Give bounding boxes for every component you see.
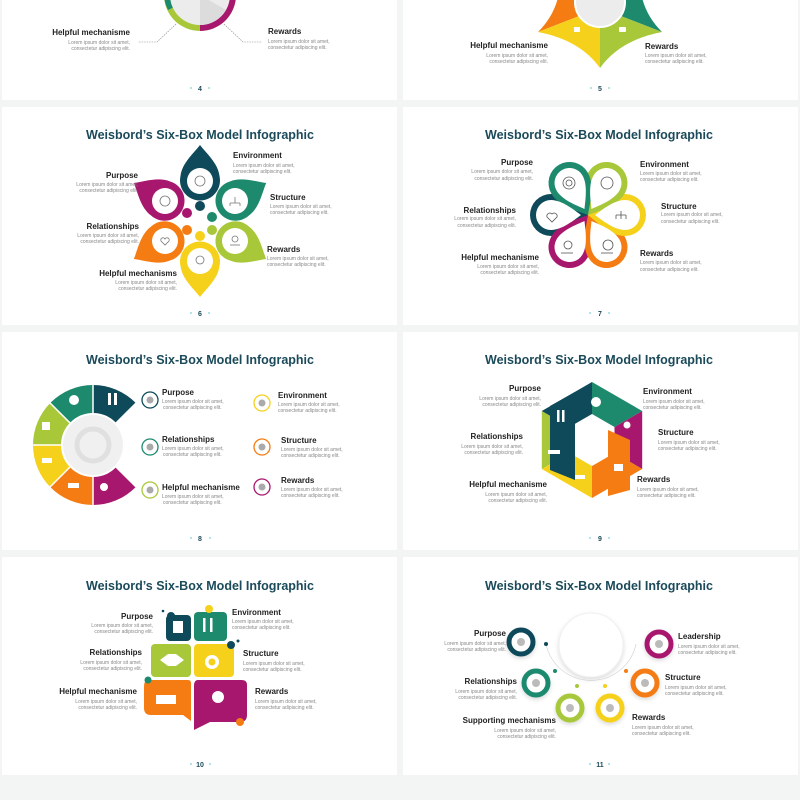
- slide 8: consectetur adipiscing elit.: [163, 452, 222, 458]
- slide 7: Structure: [661, 202, 697, 211]
- title: Weisbord’s Six-Box Model Infographic: [86, 353, 314, 367]
- slide 9: consectetur adipiscing elit.: [658, 446, 717, 452]
- label: helpful mechanisme: Helpful mechanisme: [470, 41, 549, 50]
- slide 9: Rewards: [637, 475, 671, 484]
- slide 10: Helpful mechanisme: [59, 687, 138, 696]
- page number 4: 4: [198, 86, 202, 93]
- slide 10: Lorem ipsum dolor sit amet,: [243, 661, 305, 667]
- title: Weisbord’s Six-Box Model Infographic: [485, 353, 713, 367]
- labels slide 8: Purpose: [162, 388, 195, 397]
- page number 9: 9: [598, 536, 602, 543]
- slide 10: Structure: [243, 649, 279, 658]
- slide 8: Helpful mechanisme: [162, 483, 240, 492]
- label: helpful mechanisme: consectetur adipiscing elit.: [489, 59, 548, 65]
- page number 5: 5: [598, 86, 602, 93]
- slide 6: consectetur adipiscing elit.: [80, 239, 139, 245]
- slide 6: consectetur adipiscing elit.: [267, 262, 326, 268]
- slide 10: consectetur adipiscing elit.: [243, 667, 302, 673]
- slide 11: consectetur adipiscing elit.: [678, 650, 737, 656]
- page number 11: [589, 762, 610, 769]
- slide 9: Relationships: [471, 432, 524, 441]
- title: Weisbord’s Six-Box Model Infographic: [86, 128, 314, 142]
- labels slide 6: Lorem ipsum dolor sit amet,: [233, 163, 295, 169]
- page number 8: [190, 536, 211, 543]
- slide 6: consectetur adipiscing elit.: [270, 210, 329, 216]
- item rings: [509, 630, 671, 720]
- labels slide 11: Lorem ipsum dolor sit amet,: [444, 641, 506, 647]
- slide 7: Lorem ipsum dolor sit amet,: [640, 171, 702, 177]
- slide 10: Lorem ipsum dolor sit amet,: [80, 660, 142, 666]
- slide 7: consectetur adipiscing elit.: [640, 177, 699, 183]
- slide 9: Lorem ipsum dolor sit amet,: [461, 444, 523, 450]
- slide 6: Lorem ipsum dolor sit amet,: [267, 256, 329, 262]
- page number 11: 11: [596, 762, 604, 769]
- slide 7: consectetur adipiscing elit.: [480, 270, 539, 276]
- page number 6: 6: [198, 311, 202, 318]
- slide 11: Lorem ipsum dolor sit amet,: [455, 689, 517, 695]
- slide 7: Helpful mechanisme: [461, 253, 540, 262]
- slide 7: Lorem ipsum dolor sit amet,: [661, 212, 723, 218]
- slide 8: consectetur adipiscing elit.: [281, 493, 340, 499]
- label: helpful mechanisme: Lorem ipsum dolor sit amet,: [68, 40, 130, 46]
- slide 6: Lorem ipsum dolor sit amet,: [77, 233, 139, 239]
- slide 11: consectetur adipiscing elit.: [665, 691, 724, 697]
- slide 6: consectetur adipiscing elit.: [118, 286, 177, 292]
- labels slide 10: consectetur adipiscing elit.: [94, 629, 153, 635]
- title: Weisbord’s Six-Box Model Infographic: [86, 579, 314, 593]
- label: helpful mechanisme: [470, 41, 549, 65]
- pie chart: [164, 0, 236, 31]
- slide 11: [403, 557, 798, 775]
- slide 5 (partial): [403, 0, 798, 100]
- slide 7: consectetur adipiscing elit.: [457, 223, 516, 229]
- page number 8: 8: [198, 536, 202, 543]
- slide 9: consectetur adipiscing elit.: [643, 405, 702, 411]
- labels slide 7: consectetur adipiscing elit.: [474, 176, 533, 182]
- label: rewards: consectetur adipiscing elit.: [645, 59, 704, 65]
- slide 10: Environment: [232, 608, 281, 617]
- label: rewards: [645, 42, 707, 65]
- slide 11: Supporting mechanisms: [463, 716, 557, 725]
- slide 10: Lorem ipsum dolor sit amet,: [232, 619, 294, 625]
- label: rewards: Lorem ipsum dolor sit amet,: [268, 39, 330, 45]
- slide 11: Leadership: [678, 632, 721, 641]
- slide 9: Environment: [643, 387, 692, 396]
- slide 6: Rewards: [267, 245, 301, 254]
- slide 6: Structure: [270, 193, 306, 202]
- arc with dots: [544, 642, 636, 688]
- slide 7: Rewards: [640, 249, 674, 258]
- center circle: [559, 613, 623, 677]
- page number 10: 10: [196, 762, 204, 769]
- page number 7: 7: [598, 311, 602, 318]
- slide 6: Purpose: [106, 171, 139, 180]
- slide 9: Lorem ipsum dolor sit amet,: [637, 487, 699, 493]
- slide 8: Rewards: [281, 476, 315, 485]
- slide 9: Lorem ipsum dolor sit amet,: [643, 399, 705, 405]
- page number 9: [589, 536, 610, 543]
- page number 10: [190, 762, 211, 769]
- slide 6: consectetur adipiscing elit.: [79, 188, 138, 194]
- slide 8: [2, 332, 397, 550]
- slide 8: Environment: [278, 391, 327, 400]
- label: rewards: Rewards: [268, 27, 302, 36]
- slide 6: Lorem ipsum dolor sit amet,: [270, 204, 332, 210]
- slide 10: Lorem ipsum dolor sit amet,: [255, 699, 317, 705]
- slide 8: Lorem ipsum dolor sit amet,: [281, 447, 343, 453]
- slide 9: Lorem ipsum dolor sit amet,: [658, 440, 720, 446]
- labels slide 8: consectetur adipiscing elit.: [163, 405, 222, 411]
- slide 7: Lorem ipsum dolor sit amet,: [477, 264, 539, 270]
- slide 9: Lorem ipsum dolor sit amet,: [485, 492, 547, 498]
- slide 9: Helpful mechanisme: [469, 480, 548, 489]
- slide 8: Lorem ipsum dolor sit amet,: [278, 402, 340, 408]
- slide 10: consectetur adipiscing elit.: [255, 705, 314, 711]
- slide 10: Lorem ipsum dolor sit amet,: [75, 699, 137, 705]
- flower petals: [124, 145, 276, 297]
- labels slide 8: [162, 388, 224, 411]
- page number 4: [190, 86, 210, 93]
- labels slide 6: [233, 151, 295, 175]
- labels slide 11: Purpose: [474, 629, 507, 638]
- labels slide 10: Purpose: [121, 612, 154, 621]
- ring diagram: [29, 383, 126, 507]
- slide 6: Relationships: [87, 222, 140, 231]
- title: Weisbord’s Six-Box Model Infographic: [485, 579, 713, 593]
- speech box cluster: [144, 605, 247, 730]
- slide 11: Lorem ipsum dolor sit amet,: [665, 685, 727, 691]
- labels slide 9: consectetur adipiscing elit.: [482, 402, 541, 408]
- labels slide 8: Lorem ipsum dolor sit amet,: [162, 399, 224, 405]
- slide 4 (partial): [2, 0, 397, 100]
- slide 9: Structure: [658, 428, 694, 437]
- slide 7: [403, 107, 798, 325]
- slide 10: [2, 557, 397, 775]
- slide 7: Lorem ipsum dolor sit amet,: [640, 260, 702, 266]
- slide 10: Relationships: [90, 648, 143, 657]
- star diagram: [538, 0, 662, 68]
- slide 9: [403, 332, 798, 550]
- page number 5: [590, 86, 610, 93]
- labels slide 6: consectetur adipiscing elit.: [233, 169, 292, 175]
- slide 6: Lorem ipsum dolor sit amet,: [115, 280, 177, 286]
- label: rewards: [268, 27, 330, 51]
- label: helpful mechanisme: [52, 28, 131, 52]
- slide 10: consectetur adipiscing elit.: [83, 666, 142, 672]
- labels slide 7: [471, 158, 534, 182]
- slide 6: Lorem ipsum dolor sit amet,: [76, 182, 138, 188]
- slide 7: Relationships: [464, 206, 517, 215]
- slide 8: Structure: [281, 436, 317, 445]
- label: rewards: Rewards: [645, 42, 679, 51]
- slide 7: Lorem ipsum dolor sit amet,: [454, 216, 516, 222]
- slide 11: consectetur adipiscing elit.: [458, 695, 517, 701]
- slide 8: Lorem ipsum dolor sit amet,: [162, 494, 224, 500]
- labels slide 9: Purpose: [509, 384, 542, 393]
- slide 6: Helpful mechanisms: [99, 269, 178, 278]
- slide 7: consectetur adipiscing elit.: [640, 267, 699, 273]
- slide 7: Environment: [640, 160, 689, 169]
- slide 10: Rewards: [255, 687, 289, 696]
- slide 9: consectetur adipiscing elit.: [637, 493, 696, 499]
- flower petals: [530, 154, 646, 276]
- label: rewards: Lorem ipsum dolor sit amet,: [645, 53, 707, 59]
- hexagon ribbon: [542, 382, 642, 498]
- slide 8: Lorem ipsum dolor sit amet,: [162, 446, 224, 452]
- labels slide 11: [444, 629, 507, 653]
- slide 8: Lorem ipsum dolor sit amet,: [281, 487, 343, 493]
- labels slide 6: Environment: [233, 151, 282, 160]
- slide 11: consectetur adipiscing elit.: [497, 734, 556, 740]
- labels slide 10: [91, 612, 154, 635]
- slide 8: consectetur adipiscing elit.: [281, 453, 340, 459]
- labels slide 9: [479, 384, 542, 408]
- label: rewards: consectetur adipiscing elit.: [268, 45, 327, 51]
- slide 9: consectetur adipiscing elit.: [464, 450, 523, 456]
- page number 6: [190, 311, 210, 318]
- slide 11: Lorem ipsum dolor sit amet,: [678, 644, 740, 650]
- slide 11: Structure: [665, 673, 701, 682]
- slide 10: consectetur adipiscing elit.: [232, 625, 291, 631]
- ring icons: [42, 393, 117, 491]
- slide 11: consectetur adipiscing elit.: [632, 731, 691, 737]
- page number 7: [589, 311, 610, 318]
- slide 11: Lorem ipsum dolor sit amet,: [494, 728, 556, 734]
- labels slide 7: Purpose: [501, 158, 534, 167]
- slide 6: [2, 107, 397, 325]
- labels slide 9: Lorem ipsum dolor sit amet,: [479, 396, 541, 402]
- labels slide 10: Lorem ipsum dolor sit amet,: [91, 623, 153, 629]
- slide 9: consectetur adipiscing elit.: [488, 498, 547, 504]
- slide 11: Rewards: [632, 713, 666, 722]
- slide 11: Relationships: [465, 677, 518, 686]
- item icons: [142, 392, 270, 498]
- labels slide 11: consectetur adipiscing elit.: [447, 647, 506, 653]
- title: Weisbord’s Six-Box Model Infographic: [485, 128, 713, 142]
- label: helpful mechanisme: Lorem ipsum dolor sit amet,: [486, 53, 548, 59]
- slide 10: consectetur adipiscing elit.: [78, 705, 137, 711]
- slide 8: consectetur adipiscing elit.: [278, 408, 337, 414]
- slide 7: consectetur adipiscing elit.: [661, 219, 720, 225]
- slide 8: Relationships: [162, 435, 215, 444]
- labels slide 7: Lorem ipsum dolor sit amet,: [471, 169, 533, 175]
- label: helpful mechanisme: consectetur adipiscing elit.: [71, 46, 130, 52]
- slide 8: consectetur adipiscing elit.: [163, 500, 222, 506]
- slide 11: Lorem ipsum dolor sit amet,: [632, 725, 694, 731]
- label: helpful mechanisme: Helpful mechanisme: [52, 28, 131, 37]
- connectors: [138, 24, 262, 42]
